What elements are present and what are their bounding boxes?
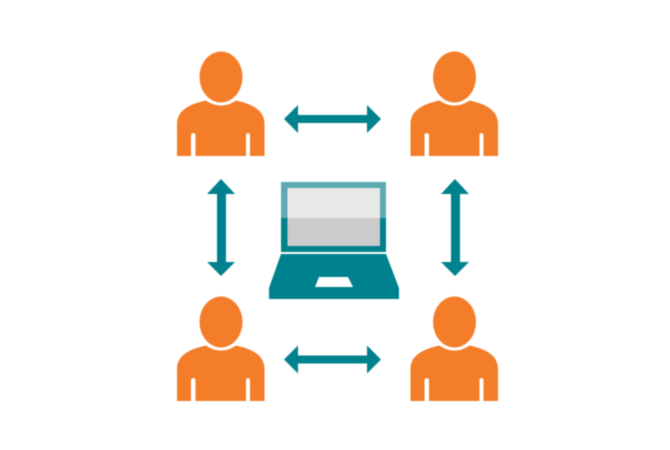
icon: person top left xyxy=(177,52,264,156)
arrow: top horizontal xyxy=(284,105,381,133)
arrow: left vertical xyxy=(207,179,235,276)
icon: person bottom right xyxy=(410,296,498,401)
icon: person top right xyxy=(410,52,498,156)
icon: laptop xyxy=(269,182,399,299)
arrow: bottom horizontal xyxy=(284,346,381,374)
arrow: right vertical xyxy=(441,179,469,276)
icon: person bottom left xyxy=(177,296,264,401)
